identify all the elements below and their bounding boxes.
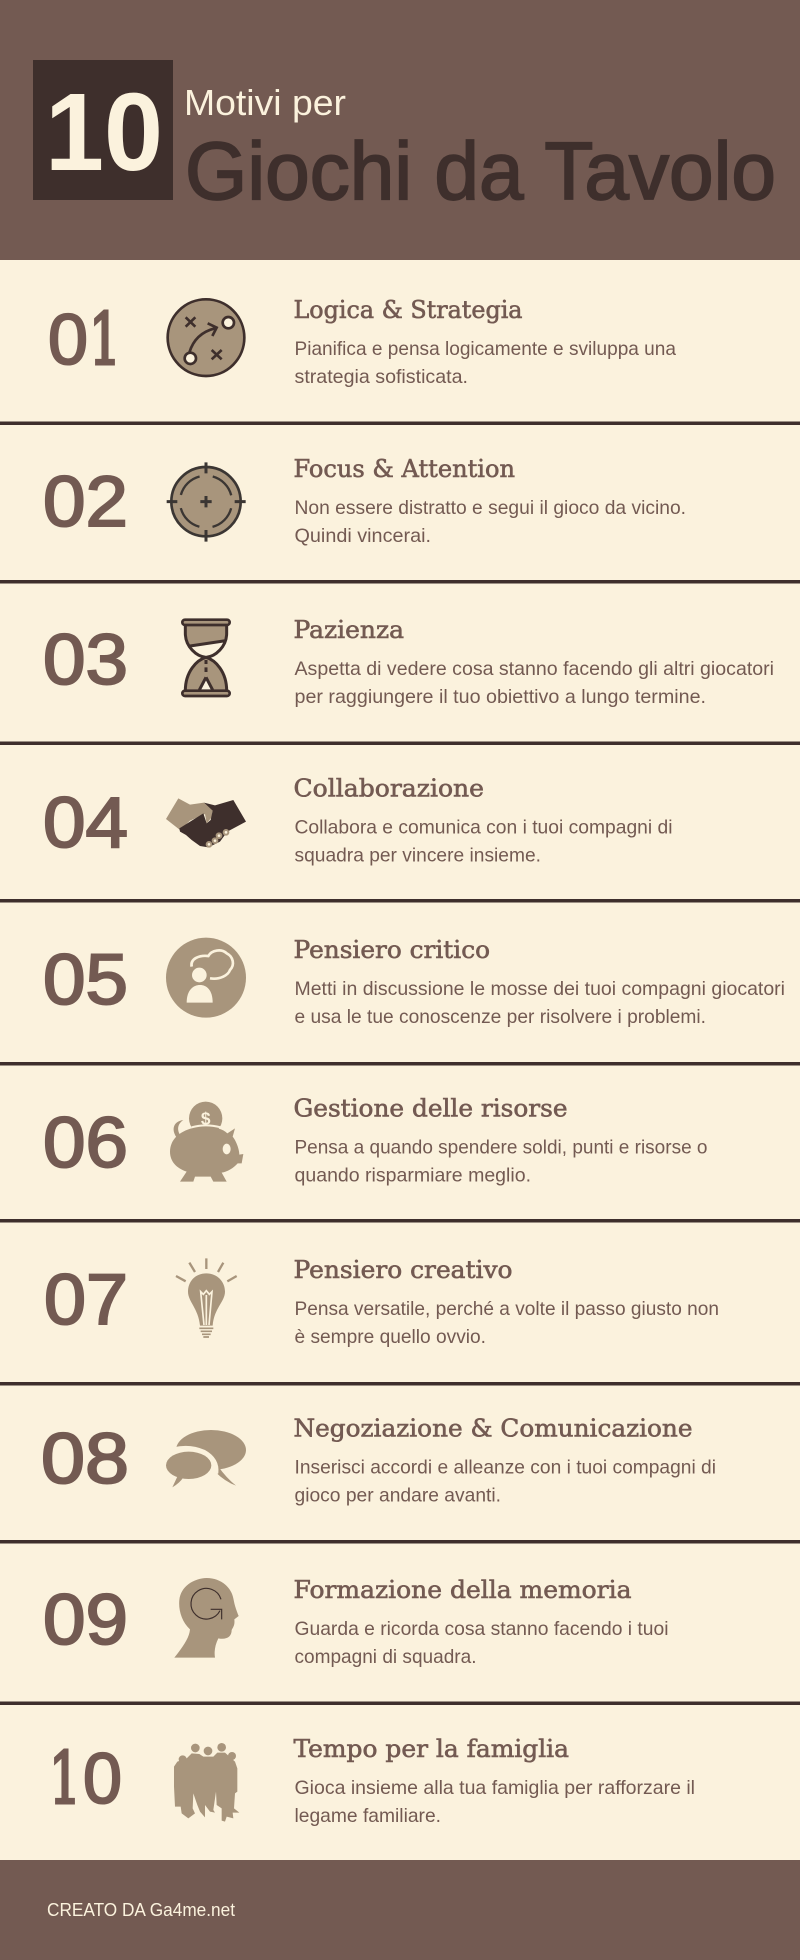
icon: piggy bank: $ — [201, 1108, 211, 1128]
description: Aspetta di vedere cosa stanno facendo gli altri giocatori — [294, 658, 774, 680]
footer — [0, 1860, 800, 1960]
icon: handshake — [166, 798, 246, 848]
description: compagni di squadra. — [294, 1646, 476, 1668]
description: Gioca insieme alla tua famiglia per rafforzare il — [294, 1777, 695, 1799]
icon: target — [167, 462, 246, 542]
description — [294, 978, 785, 1028]
icon: piggy bank — [170, 1102, 243, 1182]
description — [294, 1777, 695, 1827]
description: Quindi vincerai. — [294, 525, 431, 547]
description: squadra per vincere insieme. — [294, 844, 541, 866]
icon: speech bubbles — [166, 1430, 246, 1487]
number 08: 08 — [41, 1420, 129, 1499]
row 08: Negoziazione & Comunicazione — [41, 1414, 716, 1506]
number 06: 06 — [43, 1104, 128, 1183]
number 03: 03 — [43, 621, 128, 700]
description: strategia sofisticata. — [294, 366, 468, 388]
heading: Logica & Strategia — [294, 296, 522, 324]
description — [294, 1298, 719, 1348]
row 10: Tempo per la famiglia — [49, 1735, 695, 1827]
heading: Gestione delle risorse — [294, 1094, 568, 1122]
row 07: Pensiero creativo — [44, 1256, 719, 1348]
row 02: Focus & Attention — [43, 455, 686, 547]
description — [294, 816, 672, 866]
description: quando risparmiare meglio. — [294, 1164, 531, 1186]
description: Collabora e comunica con i tuoi compagni di — [294, 816, 672, 838]
heading: Focus & Attention — [294, 455, 515, 483]
description: Guarda e ricorda cosa stanno facendo i tuoi — [294, 1618, 668, 1640]
row 01: Logica & Strategia — [48, 296, 676, 388]
number 09: 09 — [43, 1581, 128, 1660]
description: Pensa a quando spendere soldi, punti e risorse o — [294, 1136, 708, 1158]
heading: Pazienza — [294, 616, 404, 644]
heading: Formazione della memoria — [294, 1576, 632, 1604]
description: Inserisci accordi e alleanze con i tuoi compagni di — [294, 1456, 716, 1478]
description: Metti in discussione le mosse dei tuoi compagni giocatori — [294, 978, 785, 1000]
footer credit: CREATO DA Ga4me.net — [47, 1900, 235, 1920]
heading: Pensiero critico — [294, 936, 490, 964]
description: Pensa versatile, perché a volte il passo giusto non — [294, 1298, 719, 1320]
number 01: 1 — [89, 298, 121, 381]
description — [294, 1618, 668, 1668]
heading: Negoziazione & Comunicazione — [294, 1414, 692, 1442]
number 04: 04 — [43, 784, 128, 863]
description — [294, 338, 676, 388]
number 10 — [49, 1737, 122, 1820]
subtitle: Motivi per — [184, 82, 346, 123]
heading: Pensiero creativo — [294, 1256, 512, 1284]
description — [294, 497, 686, 547]
heading: Tempo per la famiglia — [294, 1735, 569, 1763]
number 02: 02 — [43, 463, 128, 542]
description: e usa le tue conoscenze per risolvere i problemi. — [294, 1006, 706, 1028]
number 07: 07 — [44, 1261, 128, 1340]
description: legame familiare. — [294, 1805, 441, 1827]
icon: head with memory arrow — [174, 1578, 239, 1658]
description — [294, 1456, 716, 1506]
number 01: 0 — [48, 301, 88, 380]
row 03: Pazienza — [43, 616, 774, 708]
header banner — [0, 0, 800, 260]
icon: hourglass — [182, 620, 230, 696]
number badge: 10 — [45, 71, 163, 194]
row 04: Collaborazione — [43, 774, 672, 866]
description: Pianifica e pensa logicamente e sviluppa una — [294, 338, 676, 360]
row 05: Pensiero critico — [43, 936, 785, 1028]
number 05: 05 — [43, 941, 128, 1020]
icon: light bulb — [176, 1258, 237, 1337]
number 10: 0 — [83, 1740, 122, 1819]
description: gioco per andare avanti. — [294, 1484, 501, 1506]
description: è sempre quello ovvio. — [294, 1326, 486, 1348]
row 09: Formazione della memoria — [43, 1576, 668, 1668]
row 06: Gestione delle risorse — [43, 1094, 708, 1186]
description: Non essere distratto e segui il gioco da vicino. — [294, 497, 686, 519]
icon: strategy board — [168, 299, 244, 376]
description — [294, 1136, 708, 1186]
description — [294, 658, 774, 708]
icon: thinking person — [166, 938, 246, 1018]
title: Giochi da Tavolo — [185, 126, 776, 217]
number 10: 1 — [49, 1737, 81, 1820]
heading: Collaborazione — [294, 774, 484, 802]
number 01 — [48, 298, 121, 381]
description: per raggiungere il tuo obiettivo a lungo termine. — [294, 686, 706, 708]
icon: family silhouette — [174, 1743, 239, 1822]
